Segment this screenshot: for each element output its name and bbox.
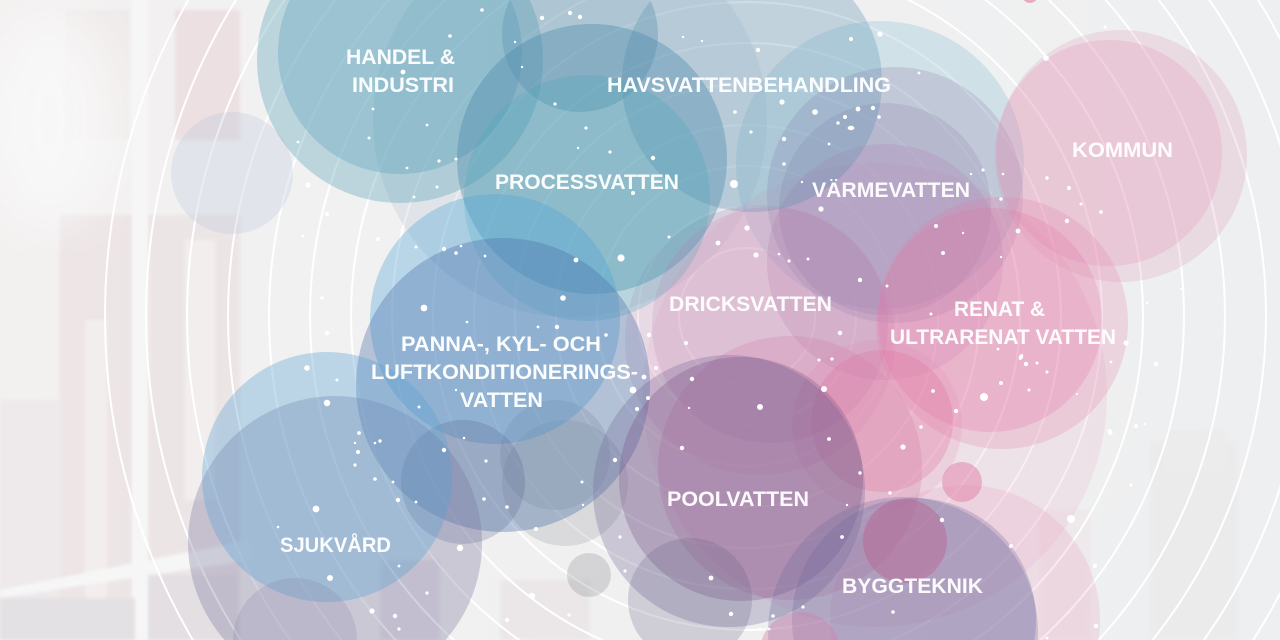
label: sjukvård: SJUKVÅRD: [280, 533, 391, 557]
label: kommun: KOMMUN: [1072, 139, 1173, 162]
bubble group: processvatten: [457, 24, 727, 321]
label: handel och industri: HANDEL &: [346, 46, 455, 69]
label: handel och industri: INDUSTRI: [352, 74, 454, 97]
label: byggteknik: BYGGTEKNIK: [842, 575, 983, 598]
labels: [280, 46, 1173, 598]
bubble group: dricksvatten: [652, 207, 888, 443]
label: panna-, kyl- och luftkonditioneringsvatten: [371, 333, 638, 412]
label: dricksvatten: DRICKSVATTEN: [669, 293, 832, 316]
label: renat och ultrarenat vatten: RENAT &: [954, 298, 1045, 321]
bubble group: grey shapes: [500, 400, 628, 597]
label: processvatten: PROCESSVATTEN: [495, 171, 679, 194]
label: panna-, kyl- och luftkonditioneringsvatten: PANNA-, KYL- OCH: [401, 333, 601, 356]
scattered white dots: [277, 8, 1182, 639]
pale background bubbles: [171, 0, 1107, 640]
bubble group: värmevatten: [767, 67, 1023, 380]
bubble group: renat och ultrarenat vatten: [792, 197, 1128, 510]
label: renat och ultrarenat vatten: ULTRARENAT VATTEN: [890, 326, 1116, 349]
bubble group: handel och industri: [257, 0, 543, 203]
bubble group: sjukvård: [188, 352, 482, 640]
label: poolvatten: POOLVATTEN: [667, 488, 809, 511]
label: panna-, kyl- och luftkonditioneringsvatten: VATTEN: [460, 389, 543, 412]
bubble group: byggteknik: [760, 497, 1038, 640]
label: panna-, kyl- och luftkonditioneringsvatten: LUFTKONDITIONERINGS-: [371, 361, 638, 384]
label: havsvattenbehandling: HAVSVATTENBEHANDLING: [607, 74, 891, 97]
bubble group: panna-, kyl- och luftkonditioneringsvatten: [356, 194, 650, 544]
bubble group: havsvattenbehandling: [502, 0, 882, 212]
label: handel och industri: [346, 46, 455, 97]
bubble group: poolvatten: [593, 336, 922, 640]
label: renat och ultrarenat vatten: [890, 298, 1116, 349]
bubble group: kommun: [995, 30, 1247, 282]
label: värmevatten: VÄRMEVATTEN: [812, 179, 970, 202]
